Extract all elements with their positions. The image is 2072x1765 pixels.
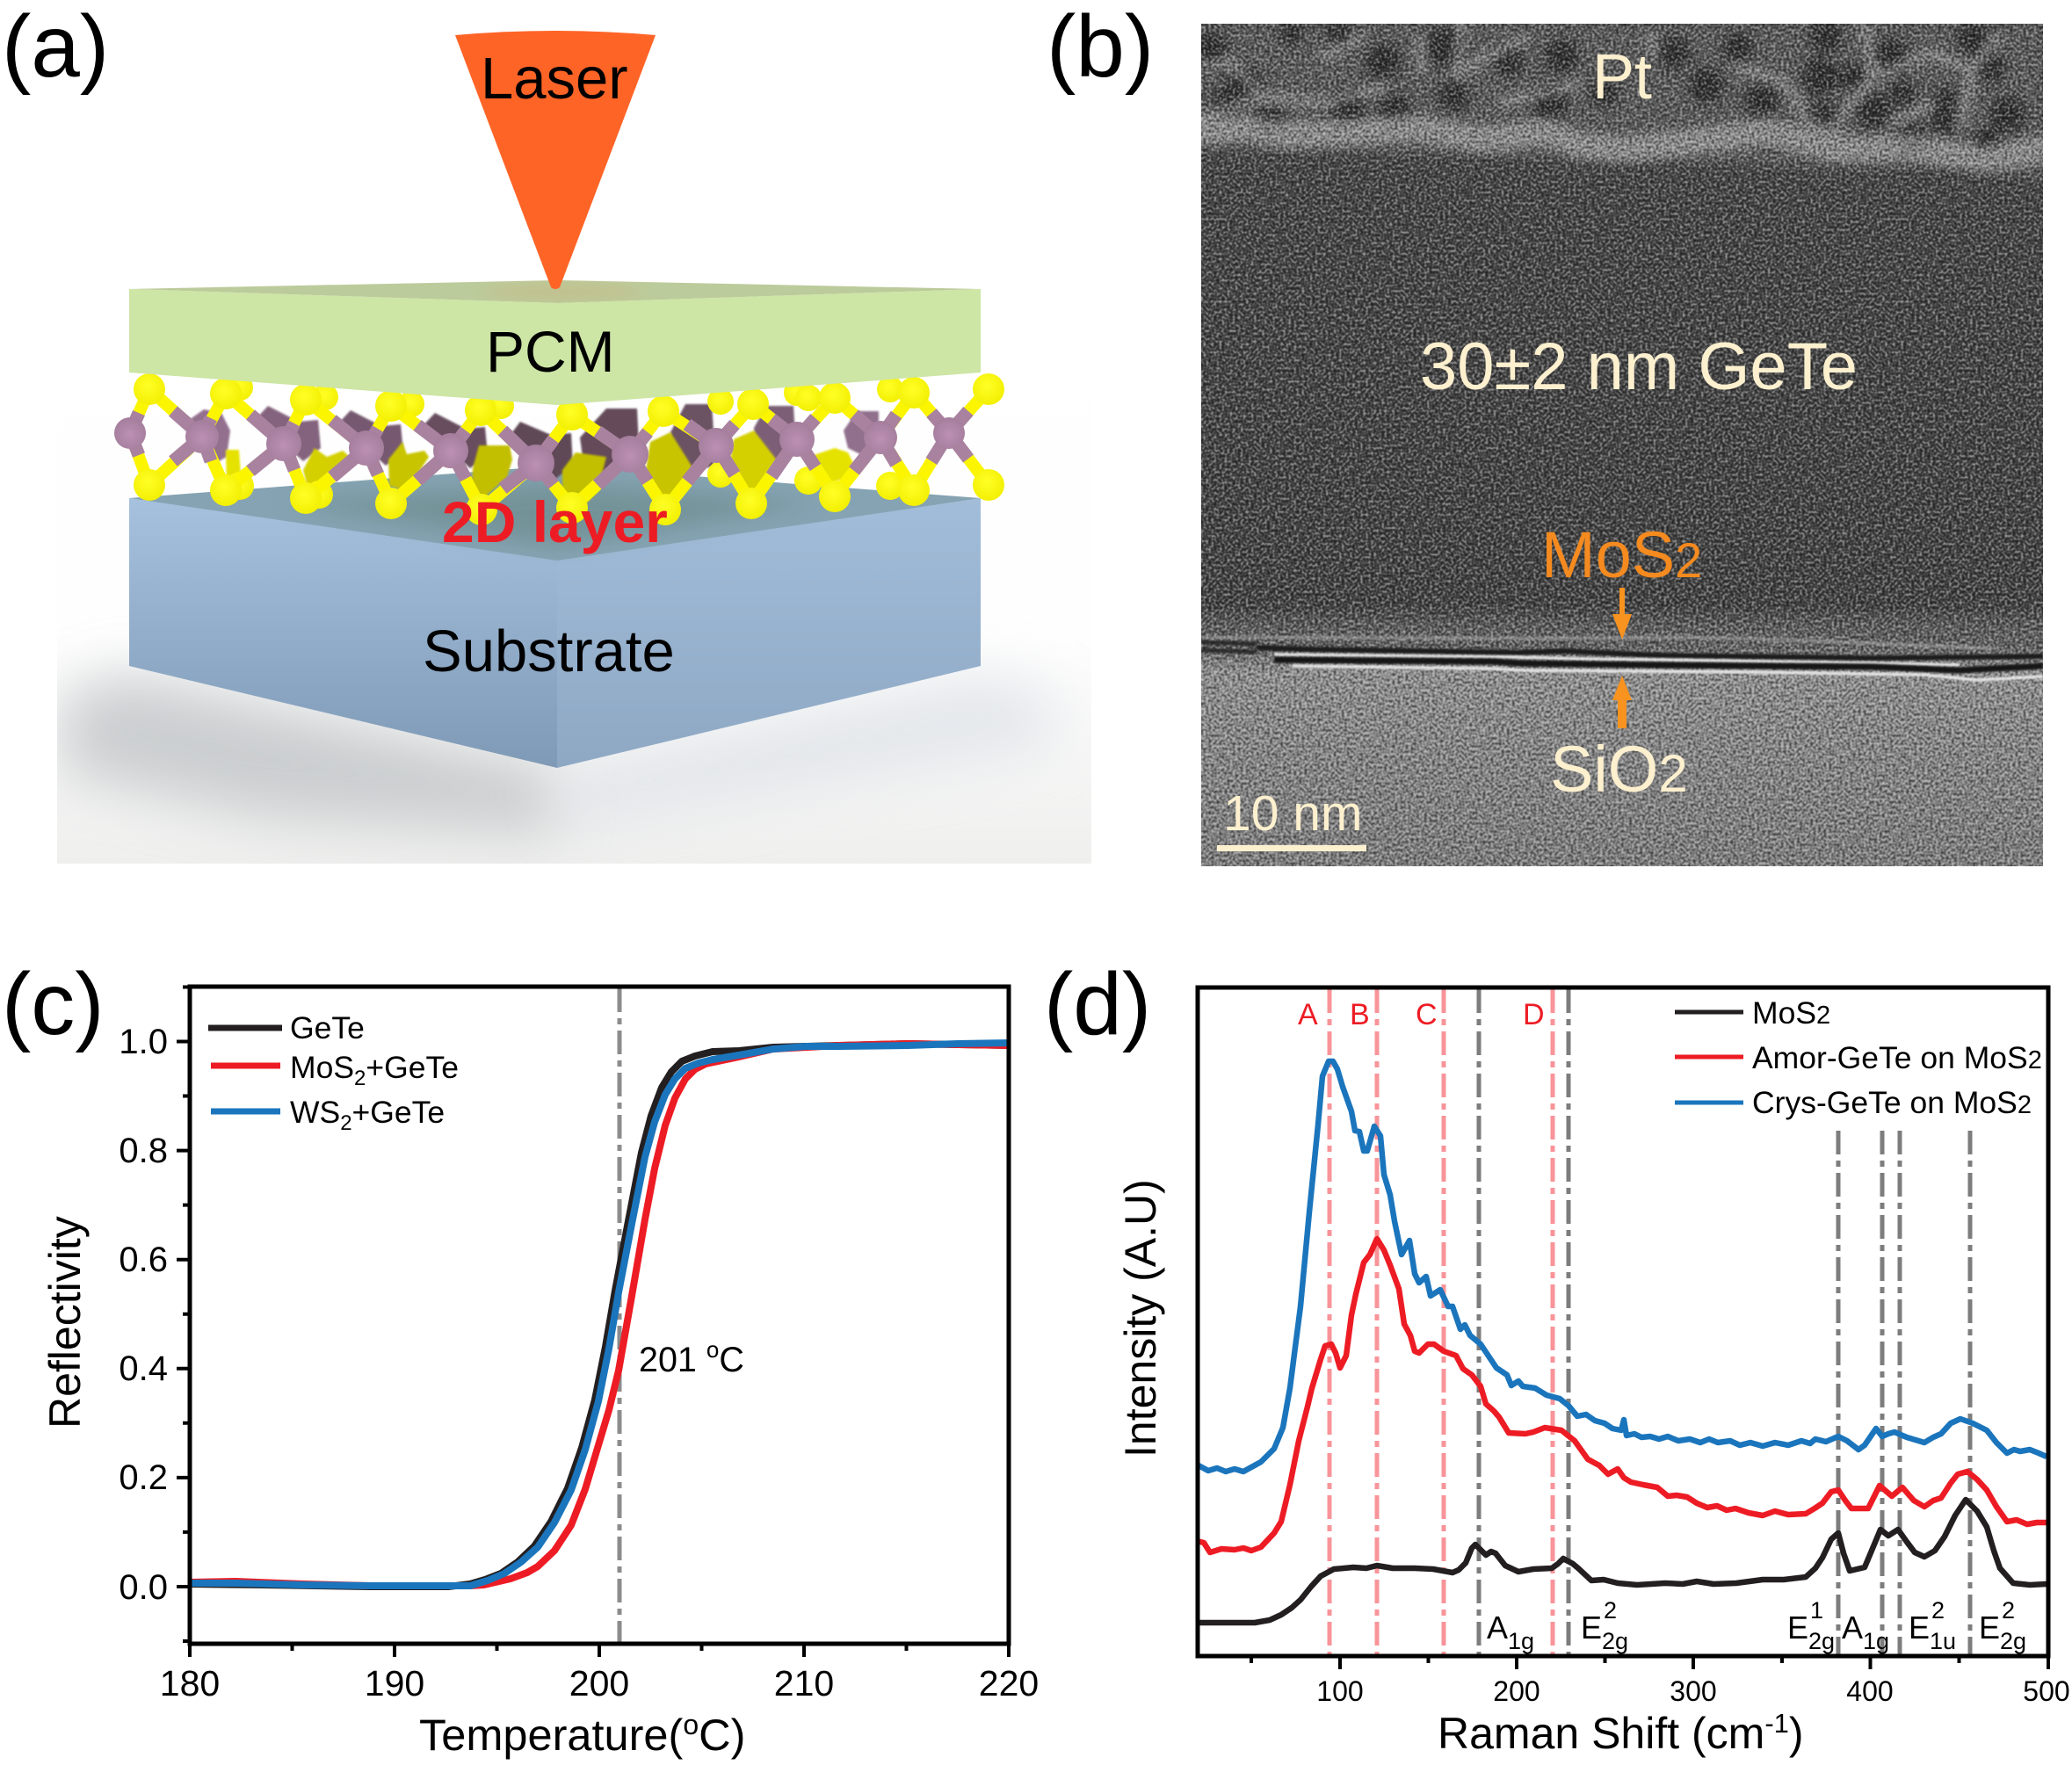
x tick labels: 300 <box>1670 1675 1717 1707</box>
label: SiO2: SiO2 <box>1550 733 1688 806</box>
legend <box>208 1010 459 1135</box>
label: MoS2: MoS2 <box>1541 518 1702 591</box>
peak letters A B C D: B <box>1350 998 1370 1031</box>
vibrational mode labels: 2 <box>1931 1597 1945 1624</box>
peak letters A B C D: D <box>1523 998 1545 1031</box>
x tick labels: 190 <box>365 1663 424 1704</box>
arrow: down to MoS2 <box>1612 588 1632 640</box>
front purple half-bonds <box>130 411 968 488</box>
201 C guide line <box>617 988 622 1643</box>
peak letters A B C D: C <box>1416 998 1438 1031</box>
MoS2 interface fringes <box>1201 637 2043 680</box>
Pt layer <box>1192 21 2043 180</box>
annotation: 201 C: C <box>719 1341 744 1379</box>
label: GeTe thickness: 30±2 nm GeTe <box>1420 329 1858 404</box>
gray peak guide lines <box>1479 989 1970 1655</box>
vibrational mode labels: A <box>1487 1609 1508 1646</box>
axes frame and ticks <box>177 987 1009 1657</box>
legend: Crys-GeTe on MoS2 <box>1752 1085 2032 1120</box>
vibrational mode labels: 2g <box>2000 1628 2026 1654</box>
label: Laser: Laser <box>481 46 628 112</box>
legend: Amor-GeTe on MoS2 <box>1752 1040 2042 1075</box>
laser beam cone <box>455 31 656 289</box>
panel: (b) TEM cross-section <box>1047 0 2043 866</box>
y axis title: Intensity (A.U) <box>1116 1179 1165 1458</box>
x tick labels <box>1316 1675 2070 1707</box>
substrate block <box>129 466 981 768</box>
back row olive wedges <box>226 430 857 514</box>
curve: WS2+GeTe <box>190 1043 1009 1586</box>
panel: (c) reflectivity vs temperature chart <box>2 955 1039 1760</box>
molybdenum atoms <box>114 417 965 481</box>
x tick labels: 400 <box>1846 1675 1894 1707</box>
curve: MoS2+GeTe <box>190 1044 1009 1586</box>
y axis title: Reflectivity <box>40 1216 90 1429</box>
x tick labels: 180 <box>160 1663 220 1704</box>
panel label (a): (a) <box>2 0 109 96</box>
legend: +GeTe <box>366 1050 459 1085</box>
legend: GeTe <box>290 1010 365 1045</box>
legend: 2 <box>340 1111 352 1135</box>
panel label (d): (d) <box>1044 955 1151 1053</box>
peak letters A B C D: A <box>1298 998 1318 1031</box>
x tick labels: 200 <box>1493 1675 1540 1707</box>
legend <box>1675 995 2042 1120</box>
y tick labels: 1.0 <box>119 1023 168 1061</box>
panel: (d) Raman spectra chart <box>1044 955 2070 1758</box>
legend: MoS2 <box>1752 995 1830 1031</box>
y tick labels <box>119 1023 168 1607</box>
vibrational mode labels: 1u <box>1930 1628 1956 1654</box>
label: Pt: Pt <box>1592 42 1652 112</box>
vibrational mode labels: E <box>1787 1609 1808 1646</box>
vibrational mode labels: 1g <box>1508 1628 1534 1654</box>
speckle noise <box>1201 24 2043 866</box>
x axis title: ) <box>1789 1709 1804 1758</box>
vibrational mode labels: E <box>1581 1609 1602 1646</box>
vibrational mode labels: 2g <box>1808 1628 1835 1654</box>
panel: (a) device schematic <box>2 0 1091 864</box>
y tick labels: 0.6 <box>119 1241 168 1279</box>
legend: +GeTe <box>352 1095 445 1130</box>
annotation: 201 C: o <box>706 1336 719 1363</box>
x axis title: Raman Shift (cm <box>1438 1709 1764 1758</box>
vibrational mode labels: 2 <box>1604 1597 1617 1624</box>
red peak guide lines <box>1329 989 1553 1655</box>
vibrational mode labels: 1 <box>1810 1597 1823 1624</box>
label: 2D layer: 2D layer <box>442 489 668 554</box>
back sulfur atoms <box>226 374 904 509</box>
top sulfur atoms <box>134 373 1004 430</box>
x tick labels: 100 <box>1316 1675 1364 1707</box>
label: PCM: PCM <box>486 319 615 384</box>
x tick labels: 500 <box>2023 1675 2070 1707</box>
legend: 2 <box>354 1067 366 1090</box>
x tick labels: 210 <box>774 1663 834 1704</box>
vibrational mode labels: A <box>1842 1609 1863 1646</box>
vibrational mode labels: 2g <box>1602 1628 1628 1654</box>
y tick labels: 0.2 <box>119 1458 168 1497</box>
panel label (b): (b) <box>1047 0 1154 96</box>
x axis title: o <box>683 1709 699 1740</box>
bottom sulfur atoms <box>134 469 1004 525</box>
peak letters A B C D <box>1298 998 1545 1031</box>
TEM micrograph <box>1192 21 2043 866</box>
annotation: 201 C: 201 <box>639 1341 697 1379</box>
legend: WS <box>290 1095 340 1130</box>
axes frame and ticks <box>1198 987 2048 1669</box>
x tick labels <box>160 1663 1039 1704</box>
back row dark purple wedges <box>189 404 879 483</box>
curve: Amor-GeTe on MoS2 <box>1197 1239 2047 1552</box>
y tick labels: 0.0 <box>119 1568 168 1607</box>
vibrational mode labels <box>1487 1597 2026 1654</box>
label: Substrate: Substrate <box>423 618 675 684</box>
arrow: up from SiO2 <box>1612 676 1632 728</box>
panel label (c): (c) <box>2 955 105 1053</box>
y tick labels: 0.4 <box>119 1349 168 1388</box>
x axis title: C) <box>699 1710 745 1760</box>
vibrational mode labels: E <box>1909 1609 1930 1646</box>
PCM slab <box>129 280 981 405</box>
x tick labels: 220 <box>979 1663 1039 1704</box>
vibrational mode labels: 1g <box>1863 1628 1889 1654</box>
y tick labels: 0.8 <box>119 1132 168 1170</box>
x axis title: -1 <box>1764 1708 1789 1739</box>
vibrational mode labels: E <box>1979 1609 2000 1646</box>
x axis title: Temperature( <box>419 1710 683 1760</box>
curve: Crys-GeTe on MoS2 <box>1197 1061 2047 1472</box>
scale bar: 10 nm <box>1223 785 1362 842</box>
curve: GeTe <box>190 1044 1009 1587</box>
x tick labels: 200 <box>569 1663 629 1704</box>
studio backdrop and shadow <box>57 648 1091 864</box>
curve: MoS2 <box>1197 1500 2047 1623</box>
MoS2 2D layer atoms <box>114 373 1004 525</box>
front yellow bonds <box>130 389 989 510</box>
legend: MoS <box>290 1050 354 1085</box>
vibrational mode labels: 2 <box>2002 1597 2015 1624</box>
